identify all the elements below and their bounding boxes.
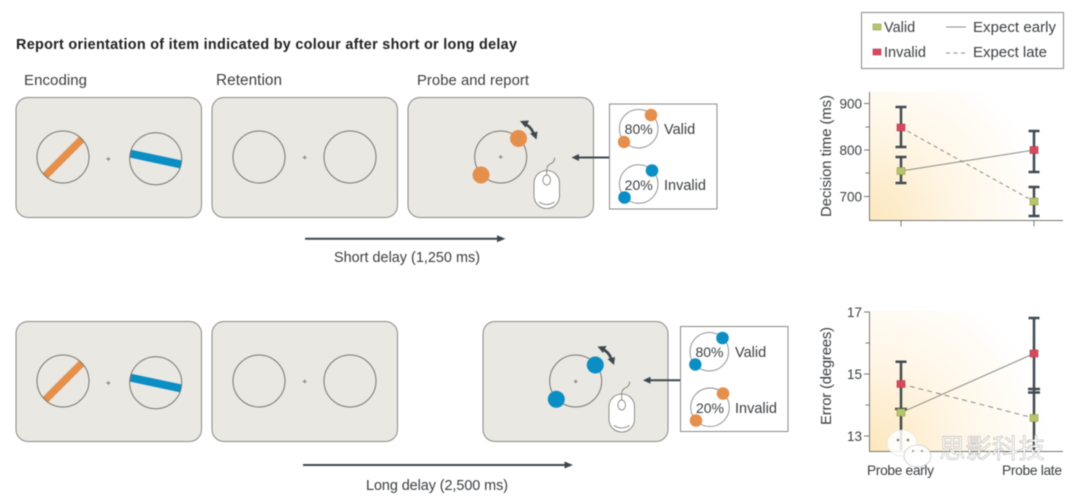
panel: short delay encoding <box>16 98 202 218</box>
label: invalid: Invalid <box>664 178 706 194</box>
label: probe early: Probe early <box>867 463 934 478</box>
line: expect early <box>901 150 1034 171</box>
watermark text: 思影科技 <box>939 427 1045 466</box>
icon: valid dot lower <box>618 136 630 148</box>
arrow: rotation <box>598 346 615 365</box>
axes <box>864 92 1063 226</box>
line: expect early <box>901 354 1034 413</box>
icon: orange handle upper <box>510 130 527 147</box>
label: 20%: 20% <box>696 400 724 416</box>
marker: invalid early <box>897 124 905 131</box>
icon: response circle <box>550 355 602 407</box>
icon: valid dot upper <box>716 332 729 344</box>
tick label 700: 700 <box>839 190 862 204</box>
label: invalid: Invalid <box>735 401 777 417</box>
fixation cross <box>303 380 307 384</box>
icon: valid dot upper <box>645 109 657 121</box>
panel: short delay validity legend <box>610 104 717 209</box>
icon: invalid dot upper <box>717 387 729 400</box>
line: expect late <box>901 384 1034 418</box>
tick label 800: 800 <box>839 143 862 158</box>
line: expect early <box>946 26 966 28</box>
icon: valid ring <box>690 332 729 371</box>
icon: mouse <box>534 158 560 208</box>
label: valid: Valid <box>735 345 766 361</box>
plot background <box>870 311 1063 451</box>
icon: left circle <box>233 131 285 183</box>
tick label 13: 13 <box>847 429 862 444</box>
marker: valid early <box>897 409 905 416</box>
icon: right circle <box>130 133 182 185</box>
fixation cross <box>574 380 578 384</box>
label: expect late: Expect late <box>973 44 1047 61</box>
label: short delay: Short delay (1,250 ms) <box>334 250 480 266</box>
fixation cross <box>106 381 110 385</box>
icon: orange handle lower <box>472 166 490 184</box>
marker: valid <box>873 24 881 30</box>
y axis title: Decision time (ms) <box>819 95 835 217</box>
panel: long delay validity legend <box>680 326 788 432</box>
panel: long delay retention <box>212 322 398 442</box>
icon: left circle <box>37 131 89 183</box>
icon: left circle <box>233 355 285 407</box>
icon: blue handle upper <box>587 356 604 374</box>
label: valid: Valid <box>664 122 695 138</box>
heading: retention: Retention <box>216 72 282 89</box>
icon: orange oriented bar <box>42 136 84 178</box>
marker: valid late <box>1030 414 1038 422</box>
icon: blue handle lower <box>548 391 565 408</box>
tick label 900: 900 <box>839 96 862 112</box>
icon: orange oriented bar <box>42 360 84 402</box>
label: probe late: Probe late <box>1002 463 1062 478</box>
icon: blue oriented bar <box>125 376 186 390</box>
arrow: legend to short probe <box>572 154 616 161</box>
label: long delay: Long delay (2,500 ms) <box>366 478 508 494</box>
icon: valid dot lower <box>689 358 702 371</box>
arrow: long delay timeline <box>303 462 573 468</box>
label: valid: Valid <box>884 20 915 36</box>
y axis title: Error (degrees) <box>819 327 835 425</box>
icon: response circle <box>475 131 527 183</box>
label: 20%: 20% <box>625 177 653 193</box>
line: expect late <box>901 128 1034 202</box>
icon: invalid ring <box>691 388 729 427</box>
tick label 17: 17 <box>847 305 862 320</box>
label: 80%: 80% <box>695 344 724 360</box>
arrow: rotation <box>520 120 538 140</box>
icon: valid ring <box>619 109 658 148</box>
icon: mouse <box>609 382 634 432</box>
chart: decision time <box>819 92 1063 226</box>
icon: chat bubbles <box>887 430 931 467</box>
chart: error <box>819 305 1063 478</box>
axes <box>864 312 1063 452</box>
icon: right circle <box>324 131 376 183</box>
icon: invalid dot lower <box>618 191 631 204</box>
icon: right circle <box>324 355 376 407</box>
panel: short delay retention <box>212 98 398 218</box>
heading: probe and report: Probe and report <box>417 73 529 89</box>
fixation cross <box>106 157 110 161</box>
line: expect late <box>946 52 966 54</box>
icon: right circle <box>130 357 182 409</box>
icon: invalid dot upper <box>646 164 658 177</box>
label: 80%: 80% <box>625 121 653 137</box>
marker: invalid late <box>1030 350 1038 357</box>
icon: invalid ring <box>619 165 658 203</box>
legend: chart key <box>862 12 1064 68</box>
arrow: short delay timeline <box>305 235 506 242</box>
marker: invalid late <box>1030 146 1038 154</box>
tick label 15: 15 <box>847 367 862 382</box>
fixation cross <box>303 156 307 160</box>
marker: invalid <box>873 49 881 55</box>
icon: left circle <box>37 355 89 407</box>
error bars <box>895 318 1040 450</box>
plot background <box>870 92 1063 220</box>
watermark <box>887 427 1045 467</box>
marker: valid late <box>1030 198 1038 205</box>
fixation cross <box>499 155 503 159</box>
label: invalid: Invalid <box>884 45 926 61</box>
title: Report orientation of item indicated by colour after short or long delay <box>16 37 517 53</box>
panel: short delay probe and report <box>408 98 594 218</box>
arrow: legend to long probe <box>643 377 687 384</box>
panel: long delay encoding <box>16 322 202 442</box>
label: expect early: Expect early <box>973 19 1056 36</box>
heading: encoding: Encoding <box>24 72 87 89</box>
icon: blue oriented bar <box>125 152 186 166</box>
marker: valid early <box>897 168 905 174</box>
error bars <box>896 107 1040 216</box>
panel: long delay probe and report <box>483 322 668 442</box>
icon: invalid dot lower <box>690 414 702 427</box>
marker: invalid early <box>897 380 905 388</box>
